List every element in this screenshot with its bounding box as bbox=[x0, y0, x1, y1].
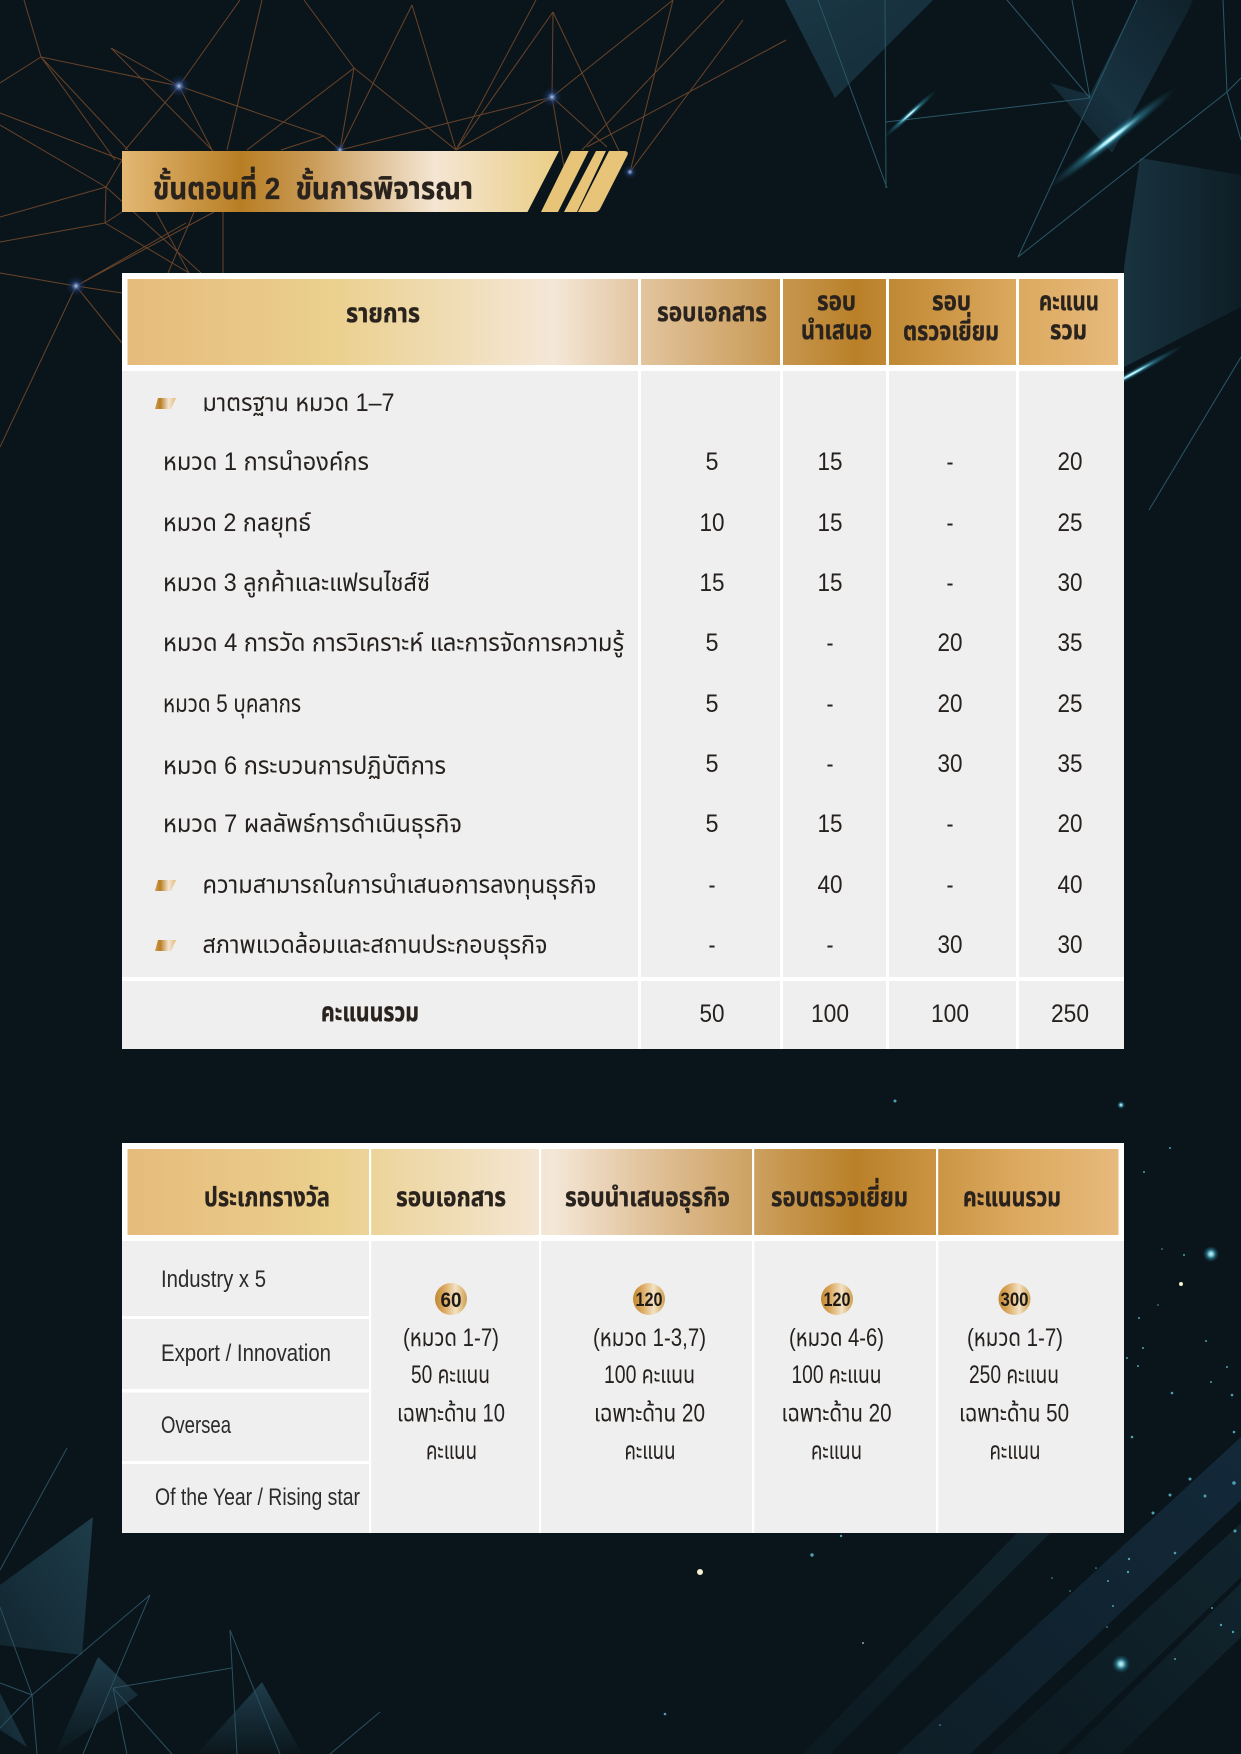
background: network star glows bbox=[66, 75, 637, 296]
row: category 5: 5 bbox=[706, 690, 718, 718]
row: category 2 bbox=[163, 509, 1082, 538]
table 1 header labels: นำเสนอ bbox=[801, 315, 872, 345]
row: business environment bbox=[155, 931, 1082, 960]
row: category 2: 10 bbox=[700, 509, 724, 537]
table 2 white frame bbox=[122, 1143, 1124, 1241]
column: site visit round scores: คะแนน bbox=[811, 1437, 862, 1465]
column: presentation round scores: (หมวด 1-3,7) bbox=[593, 1324, 706, 1352]
row: total score: 100 bbox=[811, 1000, 849, 1028]
row: investment pitch ability: ความสามารถในการนำเสนอการลงทุนธุรกิจ bbox=[202, 871, 596, 900]
row: category 6: - bbox=[826, 750, 834, 778]
row: category 3: 30 bbox=[1058, 569, 1082, 597]
table 2 header labels: ประเภทรางวัล bbox=[204, 1182, 330, 1212]
award types list: Oversea bbox=[161, 1412, 232, 1439]
badge: 120: 120 bbox=[824, 1290, 850, 1311]
row: category 6 bbox=[163, 750, 1082, 780]
table 2 header labels bbox=[204, 1178, 1061, 1213]
row: category 2: 15 bbox=[818, 509, 842, 537]
column: site visit round scores: (หมวด 4-6) bbox=[789, 1324, 884, 1352]
row: business environment: สภาพแวดล้อมและสถานประกอบธุรกิจ bbox=[202, 931, 548, 960]
row: category 5: 25 bbox=[1058, 690, 1082, 718]
row: total score bbox=[321, 997, 1089, 1028]
row: total score: 250 bbox=[1051, 1000, 1089, 1028]
table 1: scoring by round bbox=[122, 273, 1124, 1049]
row: category 1 bbox=[163, 448, 1082, 476]
row: category 7: 5 bbox=[706, 810, 718, 838]
background: diagonal bands bottom right bbox=[803, 1437, 1241, 1754]
row: category 5: 20 bbox=[938, 690, 962, 718]
column: total scores: เฉพาะด้าน 50 bbox=[959, 1400, 1069, 1428]
award types list: Of the Year / Rising star bbox=[155, 1484, 360, 1511]
row: category 5 bbox=[163, 690, 1082, 719]
badge: 60: 60 bbox=[440, 1289, 462, 1312]
row: category 4: - bbox=[826, 629, 834, 657]
award types list bbox=[155, 1266, 360, 1511]
column: presentation round scores: เฉพาะด้าน 20 bbox=[594, 1400, 705, 1428]
row: category 5: - bbox=[826, 690, 834, 718]
row: category 3 bbox=[163, 569, 1082, 598]
table 2 header labels: รอบนำเสนอธุรกิจ bbox=[565, 1182, 730, 1213]
row: category 4: หมวด 4 การวัด การวิเคราะห์ และการจัดการความรู้ bbox=[163, 629, 624, 658]
column: site visit round scores: เฉพาะด้าน 20 bbox=[782, 1400, 892, 1428]
table 1 header labels: รอบ bbox=[817, 286, 856, 316]
column: document round scores: 50 คะแนน bbox=[411, 1361, 490, 1389]
badge: 120 bbox=[633, 1283, 665, 1315]
table 1 header labels: รวม bbox=[1050, 315, 1087, 345]
table 1 header labels: รายการ bbox=[346, 298, 420, 328]
column: document round scores: คะแนน bbox=[426, 1437, 477, 1465]
award types list: Industry x 5 bbox=[161, 1266, 266, 1293]
table 2 header labels: รอบตรวจเยี่ยม bbox=[771, 1178, 908, 1212]
row: category 3: หมวด 3 ลูกค้าและแฟรนไชส์ซี bbox=[163, 569, 430, 598]
row: investment pitch ability: - bbox=[708, 871, 716, 899]
column: presentation round scores: 100 คะแนน bbox=[604, 1361, 695, 1389]
table 1 header labels: คะแนน bbox=[1039, 286, 1099, 316]
row: business environment: 30 bbox=[1058, 931, 1082, 959]
background: gold network lines top left bbox=[0, 0, 786, 447]
row: investment pitch ability bbox=[155, 871, 1082, 900]
row: category 5: หมวด 5 บุคลากร bbox=[163, 690, 301, 719]
row: category 2: 25 bbox=[1058, 509, 1082, 537]
column: presentation round scores: คะแนน bbox=[624, 1437, 676, 1465]
row: category 7: 15 bbox=[818, 810, 842, 838]
row: business environment: 30 bbox=[938, 931, 962, 959]
table 2 header gradient bbox=[128, 1149, 1118, 1235]
row: total score: 100 bbox=[931, 1000, 969, 1028]
row: category 4: 35 bbox=[1058, 629, 1082, 657]
row: category 7 bbox=[163, 810, 1082, 839]
banner stripes bbox=[541, 151, 628, 212]
table 1 header labels bbox=[346, 286, 1099, 346]
column: document round scores: เฉพาะด้าน 10 bbox=[397, 1400, 505, 1428]
row: category 4 bbox=[163, 629, 1082, 658]
column: site visit round scores: 100 คะแนน bbox=[792, 1361, 882, 1389]
row: category 7: 20 bbox=[1058, 810, 1082, 838]
row: investment pitch ability: - bbox=[946, 871, 954, 899]
heading text: ขั้นตอนที่ 2 ขั้นการพิจารณา bbox=[153, 166, 473, 206]
table 1 header labels: รอบเอกสาร bbox=[657, 297, 767, 327]
row: business environment: - bbox=[708, 931, 716, 959]
column: site visit round scores bbox=[782, 1283, 892, 1465]
row: category 1: 15 bbox=[818, 448, 842, 476]
column: total scores: คะแนน bbox=[990, 1437, 1040, 1465]
table 1 header labels: ตรวจเยี่ยม bbox=[903, 312, 999, 346]
row: category 6: 5 bbox=[706, 750, 718, 778]
badge: 300 bbox=[998, 1283, 1030, 1315]
row: category 1: หมวด 1 การนำองค์กร bbox=[163, 448, 369, 476]
row: category 6: หมวด 6 กระบวนการปฏิบัติการ bbox=[163, 752, 446, 780]
row: category 7: หมวด 7 ผลลัพธ์การดำเนินธุรกิจ bbox=[163, 810, 462, 839]
award types list: Export / Innovation bbox=[161, 1340, 331, 1367]
banner: step heading bbox=[122, 151, 628, 212]
row: category 2: - bbox=[946, 509, 954, 537]
badge: 120 bbox=[821, 1283, 853, 1315]
row: category 6: 30 bbox=[938, 750, 962, 778]
badge: 60 bbox=[435, 1283, 467, 1315]
row: category 3: 15 bbox=[818, 569, 842, 597]
table 2 body bbox=[122, 1241, 1124, 1533]
background: cyan facets top right bbox=[785, 0, 1241, 510]
badge: 300: 300 bbox=[1000, 1290, 1028, 1311]
banner bar bbox=[122, 151, 559, 212]
row: total score: คะแนนรวม bbox=[321, 997, 419, 1027]
column: total scores bbox=[959, 1283, 1069, 1465]
column: total scores: 250 คะแนน bbox=[969, 1361, 1059, 1389]
row: standards heading: มาตรฐาน หมวด 1–7 bbox=[202, 389, 394, 417]
table 2: score by award type bbox=[122, 1143, 1124, 1533]
row: category 4: 20 bbox=[938, 629, 962, 657]
row: category 2: หมวด 2 กลยุทธ์ bbox=[163, 509, 311, 538]
row: category 3: 15 bbox=[700, 569, 724, 597]
badge: 120: 120 bbox=[636, 1290, 662, 1311]
table 1 header gradient bbox=[128, 279, 1118, 365]
table 1 white frame bbox=[122, 273, 1124, 371]
row: investment pitch ability: 40 bbox=[818, 871, 842, 899]
row: category 3: - bbox=[946, 569, 954, 597]
background: star field bbox=[664, 1100, 1236, 1726]
table 2 header labels: คะแนนรวม bbox=[963, 1182, 1061, 1212]
row: category 1: 20 bbox=[1058, 448, 1082, 476]
row: category 6: 35 bbox=[1058, 750, 1082, 778]
row: investment pitch ability: 40 bbox=[1058, 871, 1082, 899]
column: total scores: (หมวด 1-7) bbox=[967, 1324, 1063, 1352]
column: document round scores bbox=[397, 1283, 505, 1465]
row: category 1: - bbox=[946, 448, 954, 476]
row: category 4: 5 bbox=[706, 629, 718, 657]
row: business environment: - bbox=[826, 931, 834, 959]
column: document round scores: (หมวด 1-7) bbox=[403, 1324, 499, 1352]
background: cyan facets bottom left bbox=[0, 1448, 380, 1754]
table 2 header labels: รอบเอกสาร bbox=[396, 1182, 506, 1212]
row: category 1: 5 bbox=[706, 448, 718, 476]
row: category 7: - bbox=[946, 810, 954, 838]
column: presentation round scores bbox=[593, 1283, 706, 1465]
table 1 body bbox=[122, 371, 1124, 1049]
table 1 header labels: รอบ bbox=[932, 286, 971, 316]
row: total score: 50 bbox=[700, 1000, 724, 1028]
